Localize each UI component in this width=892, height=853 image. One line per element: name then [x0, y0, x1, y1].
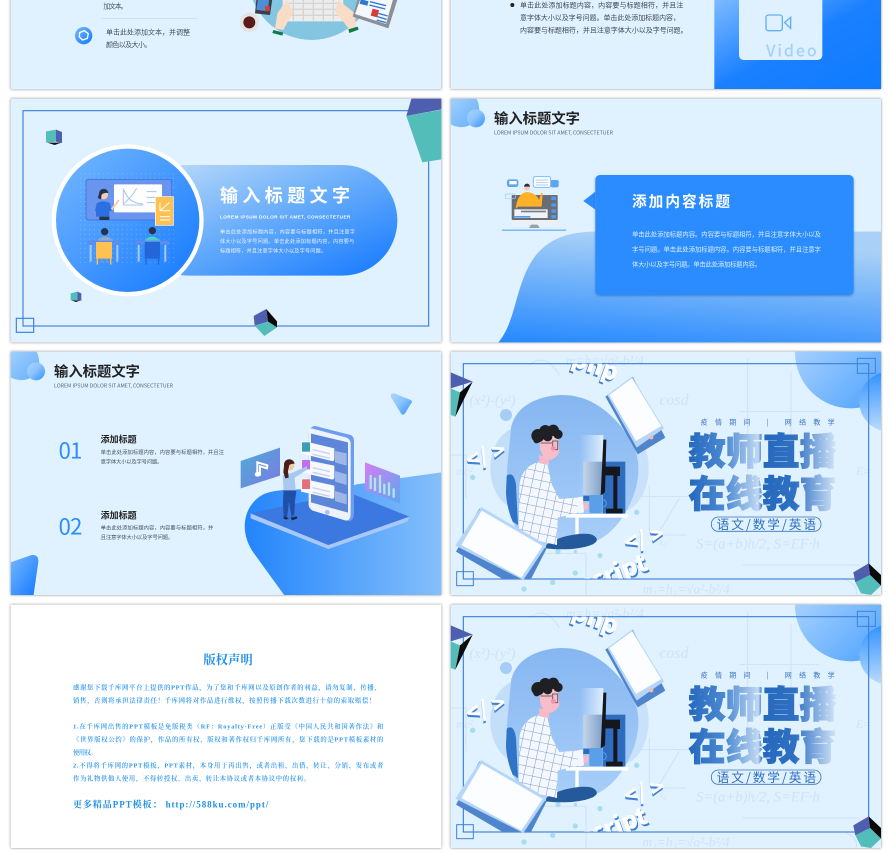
code tokens: script — [575, 545, 653, 602]
background formulas: m₁=h₁=√a²-b²/4 — [643, 834, 730, 849]
background formulas: mc² — [456, 719, 473, 731]
code tokens: </ > — [620, 519, 667, 560]
decorative blob — [11, 352, 45, 380]
code tokens: script — [574, 796, 652, 853]
code tokens: </ > — [461, 435, 510, 478]
copyright body: 2.不得将千库网的PPT模板、PPT素材，本身用于再出售，或者出租、出借、转让、分销、发布或者 — [73, 760, 384, 770]
code tokens: script — [574, 543, 652, 600]
cube: left — [451, 372, 473, 417]
callout body: 单击此处添加标题内容。内容要与标题相符，并且注意字体大小以及 — [632, 230, 822, 239]
corner circles — [795, 296, 892, 432]
main title: 在线教育 — [689, 464, 837, 518]
illustration: phone platform scene — [241, 426, 409, 549]
main title: 教师直播 — [689, 674, 837, 728]
cube: lower left — [71, 292, 81, 302]
code tokens — [461, 339, 667, 602]
hill background — [498, 232, 881, 343]
bullet text block: 单击此处添加标题内容，内容要与标题相符，并且注 — [520, 0, 683, 10]
item 02: 单击此处添加标题内容，内容要与标题相符，并 — [101, 523, 214, 531]
code tokens: </ > — [620, 772, 667, 813]
corner squares — [457, 358, 875, 586]
item 02: 且注意字体大小以及字号问题。 — [101, 533, 173, 541]
copyright body: 感谢您下载千库网平台上提供的PPT作品，为了您和千库网以及原创作者的利益，请勿复制、传播、 — [73, 682, 381, 692]
illustration: desk with keyboard, hands, tablet and coffee — [240, 0, 398, 40]
background formulas — [446, 353, 871, 596]
text: top fragment: 加文本。 — [103, 1, 127, 11]
code tokens: script — [575, 798, 653, 853]
subject pill: 语文/数学/英语 — [717, 514, 816, 533]
subject pill: 语文/数学/英语 — [717, 767, 816, 786]
panel: copyright notice — [11, 605, 441, 848]
code tokens — [461, 592, 667, 853]
subheading: LOREM IPSUM DOLOR SIT AMET, CONSECTETUER — [494, 129, 614, 137]
hill background — [245, 472, 441, 597]
item 01 — [60, 434, 224, 464]
callout body: 字号问题。单击此处添加标题内容。内容要与标题相符，并且注意字 — [632, 244, 821, 253]
cube: bottom — [254, 309, 277, 336]
illustration: teacher at computer — [455, 630, 665, 833]
code tokens: php — [567, 341, 623, 390]
cube: bottom right — [853, 563, 881, 595]
heading: 输入标题文字 — [54, 361, 140, 382]
code tokens: </ > — [461, 688, 510, 731]
video card: Video — [765, 38, 817, 62]
play triangle — [391, 393, 412, 415]
background formulas: x₃ — [658, 791, 667, 801]
item 01: 添加标题 — [101, 433, 137, 446]
item 01: 01 — [59, 434, 82, 466]
cube: bottom right — [853, 816, 881, 848]
item 02 — [60, 510, 214, 540]
frame — [463, 364, 869, 579]
code tokens: </ > — [620, 517, 667, 558]
illustration: presenter on monitor — [502, 177, 566, 231]
cube: upper left — [46, 130, 62, 145]
copyright body — [73, 682, 384, 783]
tagline: 疫情期间 | 网络教学 — [701, 417, 835, 427]
subheading: LOREM IPSUM DOLOR SIT AMET, CONSECTETUER — [54, 382, 174, 390]
callout box — [583, 175, 854, 295]
corner shape — [11, 555, 38, 597]
bullet text block — [510, 2, 684, 34]
background formulas: cosd — [659, 645, 690, 662]
background formulas: mc² — [456, 466, 473, 478]
background formulas: S=(a+b)h/2, S=EF·h — [696, 789, 820, 805]
more templates link: 更多精品PPT模板： http://588ku.com/ppt/ — [73, 798, 269, 809]
main title: 教师直播 — [689, 421, 837, 475]
code tokens: </ > — [461, 686, 510, 728]
blue side panel — [714, 0, 881, 89]
corner circles — [795, 549, 892, 685]
pale dots — [470, 728, 640, 845]
callout body: 体大小以及字号问题。单击此处添加标题内容。 — [632, 259, 761, 268]
panel: title slide with classroom circle — [11, 97, 442, 342]
code tokens: php — [567, 594, 623, 643]
banner body: 体大小以及字号问题。单击此处添加标题内容，内容要与 — [220, 237, 354, 245]
background formulas: m=h=√a²-b²/4 — [566, 353, 644, 368]
illustration: teacher at computer — [455, 377, 665, 580]
main title: 在线教育 — [689, 717, 837, 771]
background formulas: m₁=h₁=√a²-b²/4 — [643, 581, 730, 596]
cube: top right — [406, 97, 442, 162]
panel: cover slide — [446, 296, 892, 602]
copyright body: 《世界版权公约》的保护，作品的所有权、版权和著作权归千库网所有，您下载的是PPT模板素材的 — [73, 735, 384, 745]
banner body — [220, 227, 355, 255]
background formulas: m=h=√a²-b²/4 — [566, 606, 644, 621]
copyright body: 销售，否则将承担法律责任！千库网将对作品进行维权，按照传播下载次数进行十倍的索取赔偿！ — [73, 695, 375, 705]
copyright body: 1.在千库网出售的PPT模板是免版税类（RF：Royalty-Free）正版受《中国人民共和国著作法》和 — [73, 722, 383, 731]
bullet text block: 意字体大小以及字号问题。单击此处添加标题内容， — [520, 13, 680, 23]
main title — [689, 674, 837, 771]
background formulas: (x²)-(y²) — [469, 646, 516, 662]
panel: content slide with callout — [451, 99, 881, 343]
callout title: 添加内容标题 — [632, 190, 730, 211]
code tokens: php — [568, 592, 624, 641]
frame — [463, 617, 869, 832]
banner body: 标题相符，并且注意字体大小以及字号问题。 — [220, 247, 326, 255]
cube: left — [451, 625, 473, 670]
copyright body: 使用权。 — [73, 748, 97, 757]
pale dots — [470, 475, 640, 592]
corner square — [16, 318, 34, 332]
code tokens: </ > — [620, 770, 667, 811]
banner subtitle: LOREM IPSUM DOLOR SIT AMET, CONSECTETUER — [220, 214, 351, 219]
main title — [689, 421, 837, 518]
background formulas: x₃ — [658, 538, 667, 548]
background formulas: (x²)-(y²) — [469, 393, 516, 409]
video card — [739, 0, 822, 62]
heading: 输入标题文字 — [494, 108, 580, 129]
background formulas: cosd — [659, 392, 690, 409]
item 01: 意字体大小以及字号问题。 — [101, 457, 162, 465]
panel: two-item list slide with phone illustration — [11, 352, 441, 597]
code tokens: </ > — [461, 433, 510, 475]
background formulas — [446, 606, 871, 849]
corner squares — [457, 611, 875, 839]
code tokens: php — [568, 339, 624, 388]
pill banner — [180, 165, 398, 276]
bullet text block: 内容要与标题相符，并且注意字体大小以及字号问题。 — [520, 26, 688, 36]
item 02: 添加标题 — [101, 508, 137, 521]
decorative blob — [451, 99, 485, 127]
panel: top-left slide fragment — [11, 0, 441, 89]
callout body — [632, 230, 822, 268]
item 01: 单击此处添加标题内容，内容要与标题相符，并且注 — [101, 448, 225, 456]
copyright body: 作为礼物供他人使用，不得转授权、出卖、转让本协议或者本协议中的权利。 — [73, 773, 310, 783]
item 02: 02 — [59, 509, 82, 541]
icon: blue badge — [75, 27, 92, 44]
panel: top-right slide fragment with video card — [451, 0, 881, 89]
background formulas: S=(a+b)h/2, S=EF·h — [696, 536, 820, 552]
text: add text hint: 单击此处添加文本，并调整 — [106, 27, 190, 37]
panel: closing cover slide — [446, 549, 892, 853]
background formulas: E= — [855, 717, 871, 731]
circle illustration: classroom — [52, 144, 204, 296]
copyright title: 版权声明 — [203, 652, 253, 667]
text: add text hint: 颜色以及大小。 — [106, 40, 151, 50]
tagline: 疫情期间 | 网络教学 — [701, 670, 835, 680]
banner title: 输入标题文字 — [220, 182, 350, 208]
text: add text hint — [106, 28, 190, 48]
background formulas: E= — [855, 464, 871, 478]
banner body: 单击此处添加标题内容，内容要与标题相符，并且注意字 — [220, 227, 355, 235]
